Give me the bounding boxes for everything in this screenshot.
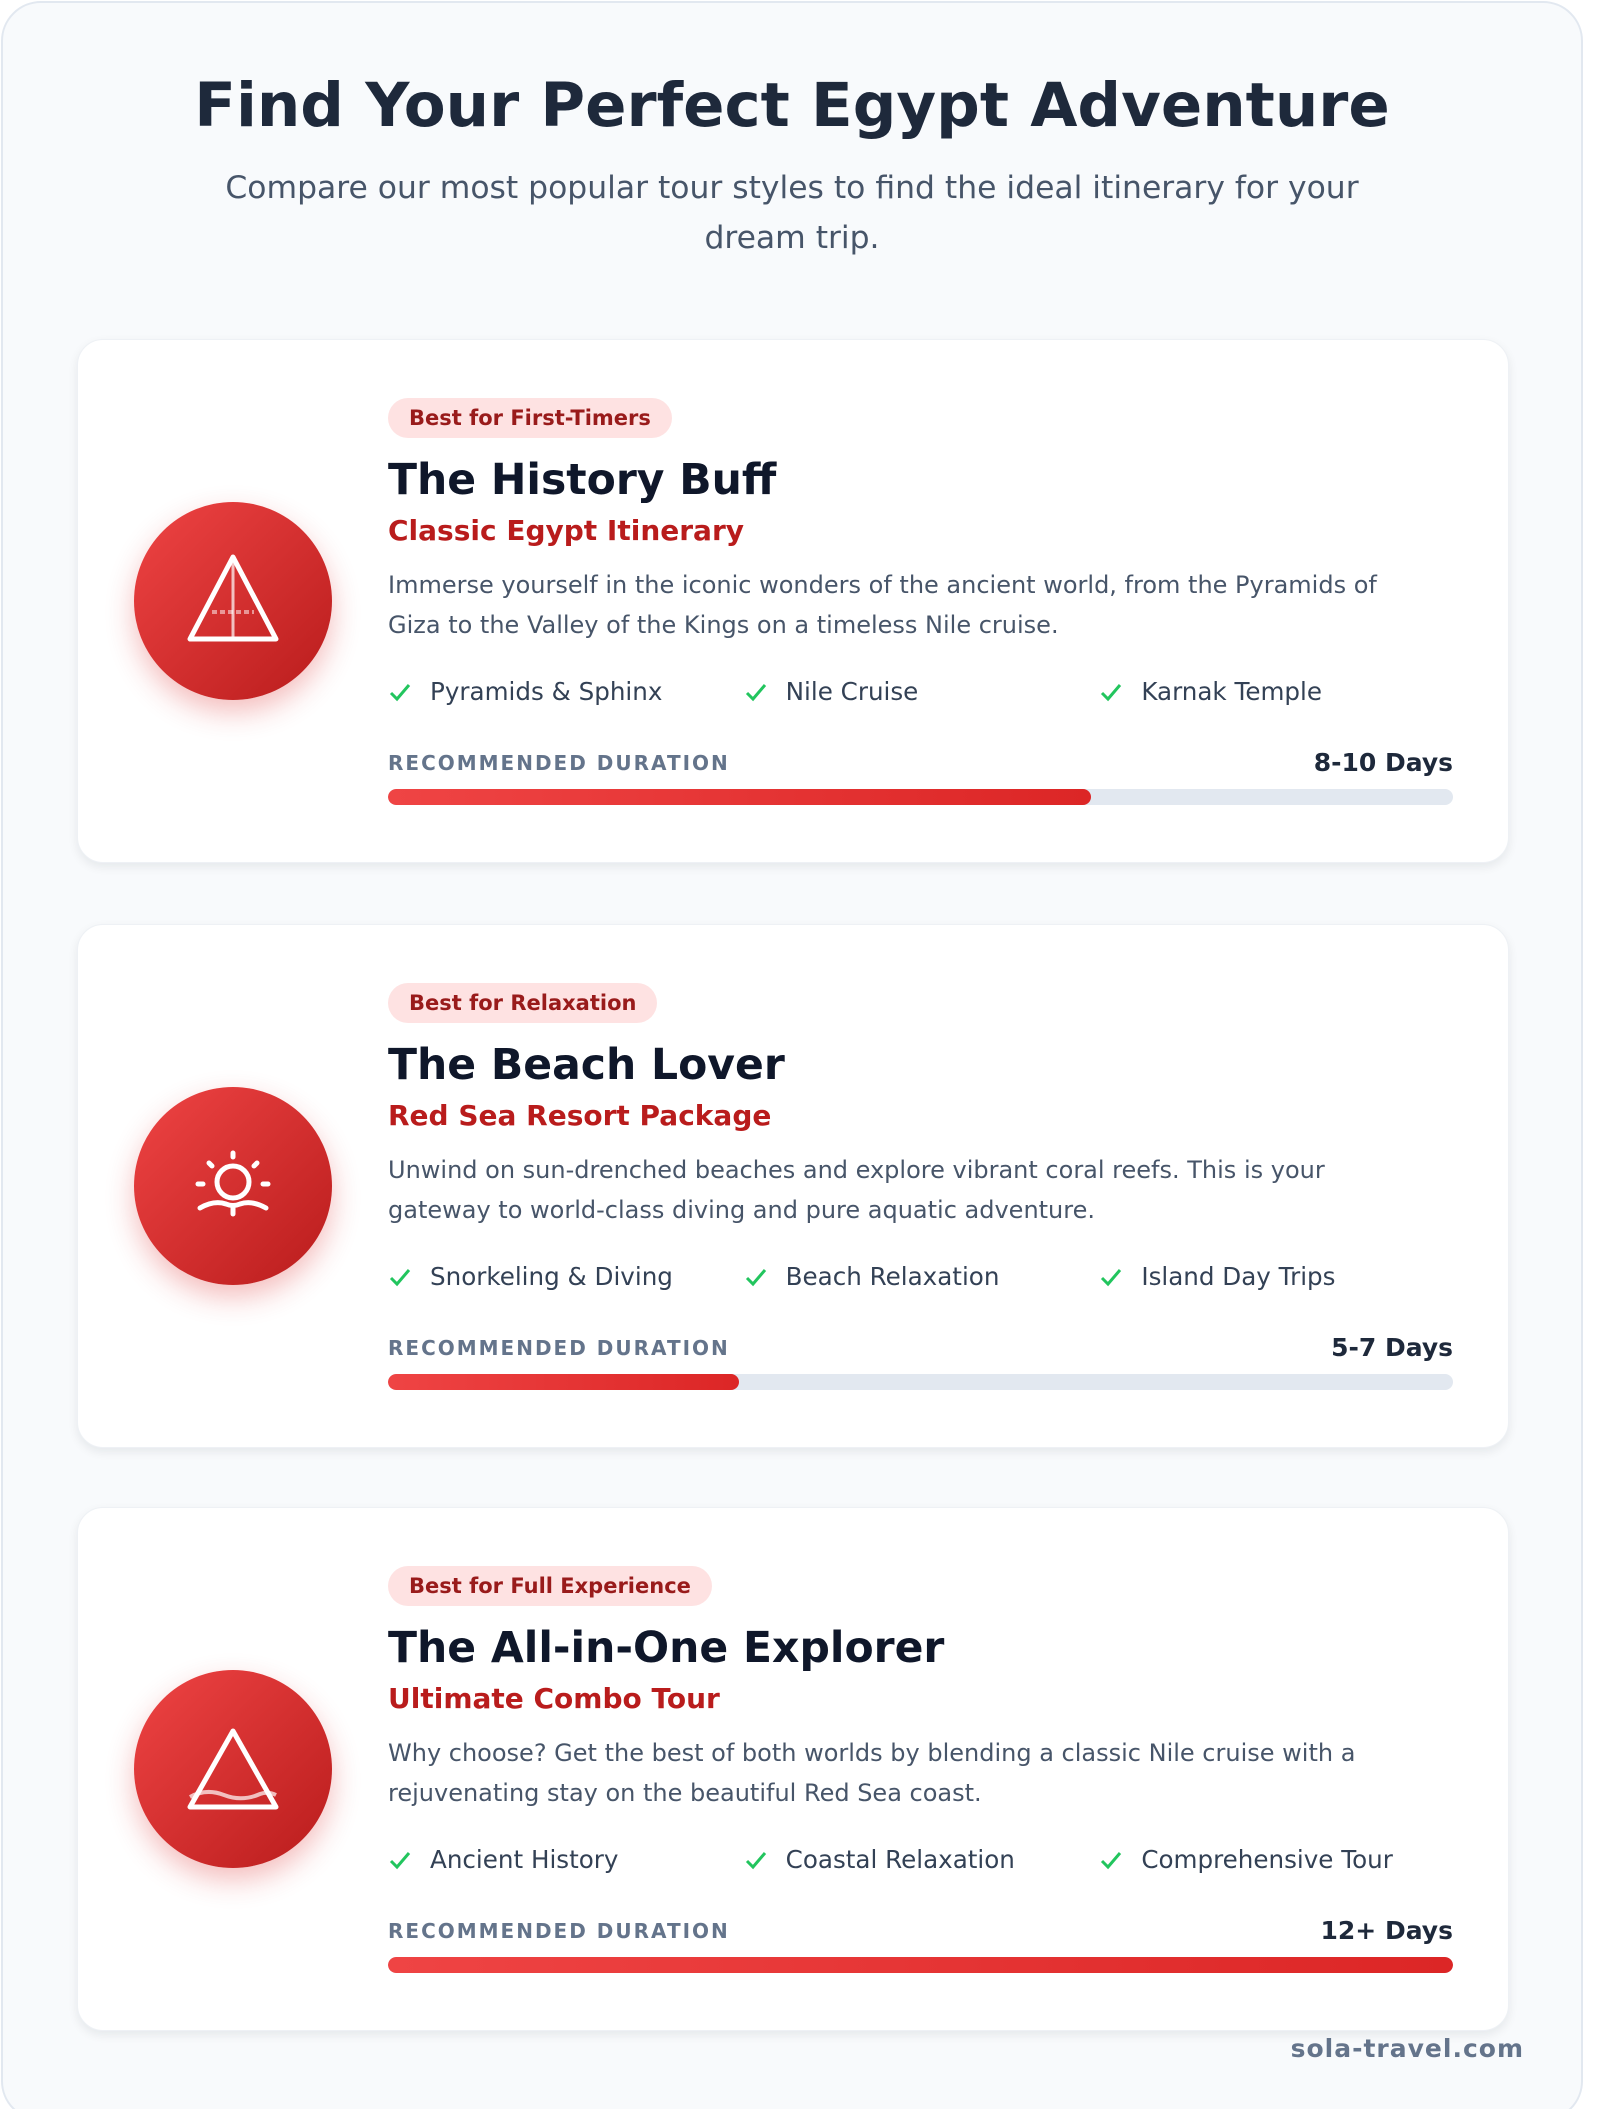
duration: RECOMMENDED DURATION — [388, 1919, 730, 1943]
features: Karnak Temple — [1141, 677, 1322, 706]
description: Unwind on sun-drenched beaches and explore vibrant coral reefs. This is your gateway to world-class diving and pure aquatic adventure. — [388, 1156, 1325, 1224]
features: Comprehensive Tour — [1141, 1845, 1393, 1874]
watermark: sola-travel.com — [1291, 2034, 1524, 2063]
badge — [388, 1566, 712, 1606]
description: Immerse yourself in the iconic wonders of the ancient world, from the Pyramids of Giza to the Valley of the Kings on a timeless Nile cruise. — [388, 571, 1377, 639]
features — [390, 1845, 1393, 1874]
features — [390, 677, 1322, 706]
features: Coastal Relaxation — [786, 1845, 1015, 1874]
duration — [388, 1333, 1453, 1362]
heading: The Beach Lover — [388, 1041, 785, 1090]
tagline: Classic Egypt Itinerary — [388, 514, 744, 547]
content — [388, 1566, 1453, 1973]
subtitle: Compare our most popular tour styles to find the ideal itinerary for your dream trip. — [225, 170, 1359, 256]
title: Find Your Perfect Egypt Adventure — [194, 70, 1390, 141]
tagline: Ultimate Combo Tour — [388, 1682, 720, 1715]
heading: The All-in-One Explorer — [388, 1624, 944, 1673]
panel: history buff — [77, 339, 1509, 863]
duration: 5-7 Days — [1331, 1333, 1453, 1362]
duration: RECOMMENDED DURATION — [388, 751, 730, 775]
badge: Best for Full Experience — [409, 1574, 691, 1598]
duration — [388, 1916, 1453, 1945]
features: Island Day Trips — [1141, 1262, 1335, 1291]
duration bar — [388, 789, 1453, 805]
content — [388, 398, 1453, 805]
content — [388, 983, 1453, 1390]
features: Pyramids & Sphinx — [430, 677, 662, 706]
panel: all-in-one explorer — [77, 1507, 1509, 2031]
duration: 8-10 Days — [1314, 748, 1453, 777]
features: Ancient History — [430, 1845, 618, 1874]
heading: The History Buff — [388, 456, 776, 505]
tagline: Red Sea Resort Package — [388, 1099, 771, 1132]
duration: RECOMMENDED DURATION — [388, 1336, 730, 1360]
icon: pyramid — [134, 502, 332, 700]
features — [390, 1262, 1335, 1291]
duration: 12+ Days — [1321, 1916, 1453, 1945]
features: Nile Cruise — [786, 677, 918, 706]
duration — [388, 748, 1453, 777]
features: Snorkeling & Diving — [430, 1262, 673, 1291]
description: Why choose? Get the best of both worlds by blending a classic Nile cruise with a rejuvenating stay on the beautiful Red Sea coast. — [388, 1739, 1355, 1807]
icon: sun — [134, 1087, 332, 1285]
badge — [388, 398, 672, 438]
panel: beach lover — [77, 924, 1509, 1448]
badge — [388, 983, 657, 1023]
icon: pyramid with wave — [134, 1670, 332, 1868]
features: Beach Relaxation — [786, 1262, 999, 1291]
badge: Best for Relaxation — [409, 991, 636, 1015]
duration bar — [388, 1374, 1453, 1390]
duration bar — [388, 1957, 1453, 1973]
badge: Best for First-Timers — [409, 406, 651, 430]
